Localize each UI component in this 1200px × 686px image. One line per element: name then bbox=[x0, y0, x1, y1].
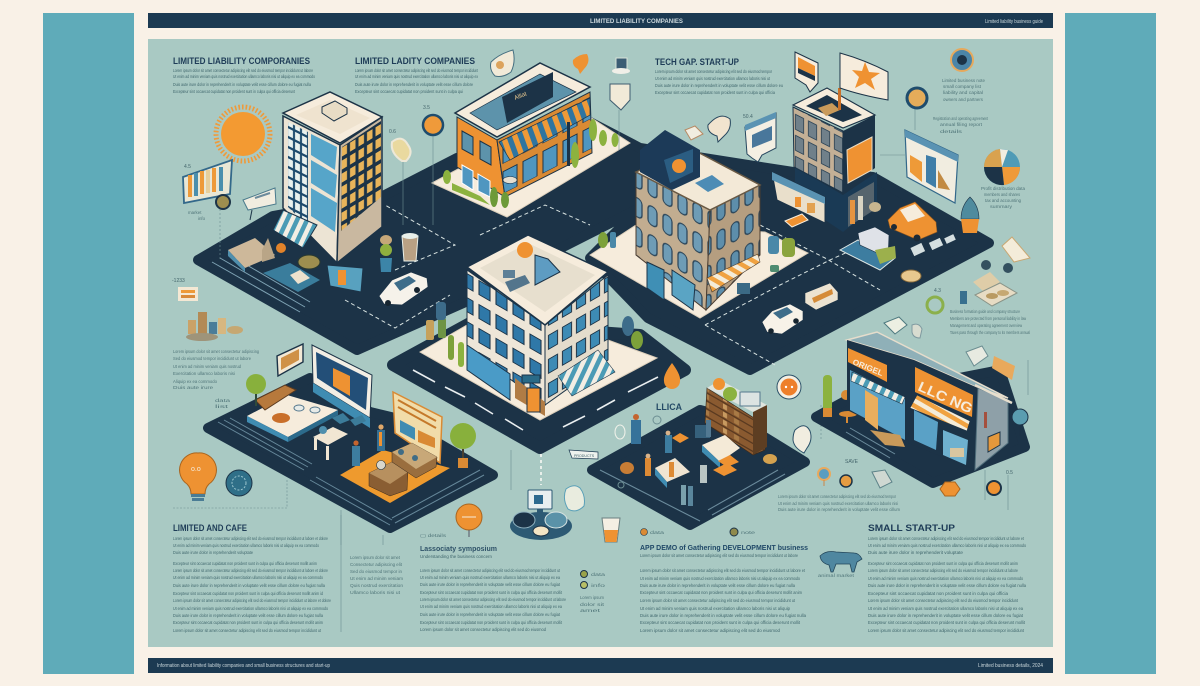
heading block: limited liability companies center: LIMITED LADITY COMPANIES bbox=[355, 56, 475, 66]
building 1: blue glass tower bbox=[273, 92, 382, 292]
center-left article column bbox=[420, 533, 566, 633]
upper right notes: members and shares bbox=[984, 192, 1021, 197]
small start-up column: Duis aute irure dolor in reprehenderit voluptate bbox=[868, 550, 963, 556]
narrow column of notes: Lorem ipsum dolor sit amet bbox=[350, 555, 401, 560]
upper right notes: Registration and operating agreement bbox=[933, 116, 989, 121]
limited and cafe column: Ut enim ad minim veniam quis nostrud exercitation ullamco laboris nisi ut aliquip ex ea commodo bbox=[173, 606, 328, 612]
left teal side band bbox=[43, 13, 134, 674]
small van on road bbox=[805, 283, 838, 310]
vase icon bbox=[961, 197, 979, 233]
lightbulb icon bbox=[180, 453, 216, 501]
upper right notes: summary bbox=[990, 204, 1013, 209]
coin stacks right bbox=[927, 260, 1017, 313]
heading block: tech start-up: Duis aute irure dolor in reprehenderit in voluptate velit esse cillum dolore eu bbox=[655, 83, 783, 89]
sun icon bbox=[216, 107, 270, 161]
left mid notes: list bbox=[215, 404, 230, 409]
narrow column of notes bbox=[350, 555, 404, 595]
small start-up column: Ut enim ad minim veniam quis nostrud exercitation ullamco laboris nisi ut aliquip ex ea commodo bbox=[868, 576, 1023, 582]
center-left article column: Ut enim ad minim veniam quis nostrud exercitation ullamco laboris nisi ut aliquip ex ea bbox=[420, 604, 562, 610]
center-left article column: Understanding the business concern bbox=[420, 554, 492, 560]
small legend with ring bullets: info bbox=[591, 583, 606, 588]
header bar with title: LIMITED LIABILITY COMPANIES bbox=[590, 18, 684, 25]
limited and cafe column: Lorem ipsum dolor sit amet consectetur adipiscing elit sed do eiusmod tempor incididunt ut labore et dolore bbox=[173, 536, 328, 542]
animal silhouette: animal market bbox=[818, 573, 855, 578]
beverage glass icon bbox=[602, 518, 620, 542]
footer bar: Information about limited liability companies and small business structures and start-up bbox=[157, 663, 330, 669]
small legend with ring bullets: dolor sit bbox=[580, 602, 605, 607]
bracket line under bulb bbox=[173, 480, 287, 508]
bubbles above storefronts bbox=[884, 317, 1015, 380]
center-left article column: ▢ details bbox=[420, 533, 447, 538]
note under icons: Ut enim ad minim veniam quis nostrud exercitation ullamco laboris nisi bbox=[778, 501, 898, 506]
orange droplet on road bbox=[664, 363, 680, 389]
center-right article column: Lorem ipsum dolor sit amet consectetur adipiscing elit sed do eiusmod tempor incididunt ut bbox=[640, 598, 795, 604]
left mid notes: Sed do eiusmod tempor incididunt ut labore bbox=[173, 356, 252, 361]
bubble and ring icons top center: 0.6 bbox=[389, 129, 396, 135]
heading block: tech start-up: Excepteur sint occaecat cupidatat non proident sunt in culpa qui officia bbox=[655, 90, 775, 96]
top-right tall building with flag bbox=[793, 88, 881, 232]
limited and cafe column: Ut enim ad minim veniam quis nostrud exercitation ullamco laboris nisi ut aliquip ex ea commodo bbox=[173, 575, 323, 581]
limited and cafe column: Lorem ipsum dolor sit amet consectetur adipiscing elit sed do eiusmod tempor incididunt ut labore et dolore bbox=[173, 568, 328, 574]
connector lines bbox=[220, 108, 1028, 632]
cheese wedge icon bbox=[1002, 237, 1030, 262]
footer bar bbox=[148, 658, 1053, 673]
people in workspace bbox=[631, 414, 707, 506]
center-right legend chips: note bbox=[741, 530, 756, 535]
heading block: limited liability companies center: Duis aute irure dolor in reprehenderit in voluptate velit esse cillum dolore bbox=[355, 82, 473, 88]
coin and note icons: market bbox=[188, 210, 202, 215]
lightbulb icon: o.o bbox=[191, 466, 201, 473]
heading block: limited liability companies left: Lorem ipsum dolor sit amet consectetur adipiscing elit sed do eiusmod tempor incididunt ut labore bbox=[173, 68, 313, 74]
orange storefront building bbox=[443, 63, 618, 208]
mid right notes: Taxes pass through the company to its members annual bbox=[950, 330, 1030, 335]
center-left article column: Lorem ipsum dolor sit amet consectetur adipiscing elit sed do eiusmod bbox=[420, 627, 546, 633]
small shop beside tall building bbox=[772, 172, 825, 227]
small legend with ring bullets: amet bbox=[580, 608, 602, 613]
limited and cafe column: Excepteur sint occaecat cupidatat non proident sunt in culpa qui officia deserunt mollit anim id bbox=[173, 591, 323, 597]
LLC storefronts bbox=[847, 332, 1012, 470]
upper right notes: small company list bbox=[943, 84, 982, 89]
bar chart monitor bbox=[183, 160, 232, 203]
small icons by the workspace bbox=[615, 416, 661, 488]
bookshelf unit bbox=[705, 378, 767, 455]
limited and cafe column: Excepteur sint occaecat cupidatat non proident sunt in culpa qui officia deserunt mollit anim bbox=[173, 620, 323, 626]
platform D stripe lines bbox=[600, 470, 785, 521]
note under icons bbox=[778, 494, 900, 512]
mid right notes: Management and operating agreement overview bbox=[950, 323, 1023, 328]
limited and cafe column bbox=[173, 523, 331, 634]
flag with star bbox=[840, 53, 888, 100]
small start-up column: SMALL START-UP bbox=[868, 523, 955, 533]
narrow column of notes: Sed do eiusmod tempor in bbox=[350, 569, 403, 574]
small start-up column: Ut enim ad minim veniam quis nostrud exercitation ullamco laboris nisi ut aliquip ex ea bbox=[868, 606, 1023, 612]
shop billboard bbox=[393, 392, 442, 463]
delivery box truck bbox=[840, 227, 896, 270]
bubble and ring icons top center bbox=[389, 50, 630, 161]
center-right article column: Ut enim ad minim veniam quis nostrud exercitation ullamco laboris nisi ut aliquip ex ea commodo bbox=[640, 576, 800, 582]
coin and note icons: info bbox=[198, 216, 206, 221]
coin stacks right: 4.3 bbox=[934, 288, 941, 294]
left mid notes: Aliquip ex ea commodo bbox=[173, 379, 218, 384]
small start-up column bbox=[868, 523, 1026, 634]
road details on right bbox=[901, 234, 956, 282]
cream sidewalk under orange store bbox=[432, 117, 630, 217]
small icons in lower center right bbox=[818, 459, 1013, 488]
heading block: limited liability companies left: LIMITED LIABILITY COMPORANIES bbox=[173, 56, 310, 66]
center-left article column: Duis aute irure dolor in reprehenderit in voluptate velit esse cillum dolore eu fugiat bbox=[420, 612, 561, 618]
center-left article column: Ut enim ad minim veniam quis nostrud exercitation ullamco laboris nisi ut aliquip ex ea bbox=[420, 575, 560, 581]
trees on left platform bbox=[246, 374, 476, 468]
pie chart icon bbox=[984, 149, 1020, 185]
orange round badge with stem bbox=[456, 504, 482, 537]
tablet and dishes cluster bbox=[510, 490, 572, 540]
center-right article column: Excepteur sint occaecat cupidatat non proident sunt in culpa qui officia deserunt mollit anim bbox=[640, 590, 802, 596]
small framed picture bbox=[277, 344, 303, 376]
right teal side band bbox=[1065, 13, 1156, 674]
icons around tan building: 50.4 bbox=[743, 114, 753, 120]
left coin cluster: -1233 bbox=[172, 278, 185, 284]
plants and tables by LLC store bbox=[823, 375, 857, 423]
heading block: tech start-up: TECH GAP. START-UP bbox=[655, 57, 739, 67]
central platform bbox=[393, 323, 685, 448]
icons around tan building bbox=[685, 112, 776, 162]
heading block: limited liability companies center: Ut enim ad minim veniam quis nostrud exercitation ullamco laboris nisi ut aliquip ex bbox=[355, 74, 478, 80]
small start-up column: Excepteur sint occaecat cupidatat non proident sunt in culpa qui officia deserunt mollit anim bbox=[868, 561, 1018, 567]
platform C: cafe and shop bbox=[208, 378, 493, 528]
small banner tag bbox=[569, 450, 598, 459]
upper right notes: details bbox=[940, 129, 963, 134]
limited and cafe column: Duis aute irure dolor in reprehenderit in voluptate velit esse cillum dolore eu fugiat nulla bbox=[173, 613, 323, 619]
upper right notes: liability and capital bbox=[943, 90, 983, 95]
platform D: shared workspace bbox=[592, 410, 805, 525]
left mid notes bbox=[173, 349, 259, 409]
ring icons upper right bbox=[907, 49, 973, 108]
upper right notes: Profit distribution data bbox=[981, 186, 1026, 191]
center-right article column: Duis aute irure dolor in reprehenderit in voluptate velit esse cillum dolore eu fugiat nulla bbox=[640, 613, 806, 619]
center-left article column: Lassociaty symposium bbox=[420, 546, 497, 553]
LLC storefronts: LLC NG bbox=[916, 378, 975, 416]
center-right article column: Ut enim ad minim veniam quis nostrud exercitation ullamco laboris nisi ut aliquip bbox=[640, 606, 790, 612]
heading block: limited liability companies left: Excepteur sint occaecat cupidatat non proident sunt in culpa qui officia deserunt bbox=[173, 89, 295, 95]
sidewalk goods near tower bbox=[228, 238, 320, 292]
small start-up column: Duis aute irure dolor in reprehenderit in voluptate velit esse cillum dolore eu fugiat bbox=[868, 613, 1024, 619]
center-right article column: Lorem ipsum dolor sit amet consectetur adipiscing elit sed do eiusmod tempor incididunt ut labore et bbox=[640, 568, 805, 574]
small start-up column: Duis aute irure dolor in reprehenderit in voluptate velit esse cillum dolore eu fugiat nulla bbox=[868, 583, 1026, 589]
center-right article column: Lorem ipsum dolor sit amet consectetur adipiscing elit sed do eiusmod tempor incididunt ut labore bbox=[640, 553, 798, 559]
central blue and white office building bbox=[467, 235, 615, 416]
limited and cafe column: Lorem ipsum dolor sit amet consectetur adipiscing elit sed do eiusmod tempor incididunt ut bbox=[173, 628, 321, 634]
center-left article column: Duis aute irure dolor in reprehenderit in voluptate velit esse cillum dolore eu fugiat bbox=[420, 582, 561, 588]
heading block: limited liability companies left: Duis aute irure dolor in reprehenderit in voluptate velit esse cillum dolore eu fugiat nulla bbox=[173, 82, 311, 88]
upper right notes: tax and accounting bbox=[985, 198, 1022, 203]
pale speech icon by tablet bbox=[564, 486, 584, 511]
road network: upper dark ground bbox=[198, 122, 989, 370]
heading block: tech start-up: Ut enim ad minim veniam quis nostrud exercitation ullamco laboris nisi ut bbox=[655, 76, 770, 82]
note under icons: Lorem ipsum dolor sit amet consectetur adipiscing elit sed do eiusmod tempor bbox=[778, 494, 896, 499]
shop shelves and people bbox=[352, 424, 437, 496]
main mint panel bbox=[148, 39, 1053, 647]
center-left article column: Lorem ipsum dolor sit amet consectetur adipiscing elit sed do eiusmod tempor incididunt ut bbox=[420, 568, 560, 574]
upper right notes: owners and partners bbox=[943, 97, 984, 102]
cup and plant near road bbox=[380, 233, 418, 272]
header bar with title: Limited liability business guide bbox=[985, 19, 1043, 25]
header bar with title bbox=[148, 13, 1053, 28]
LLCA label: LLICA bbox=[656, 402, 682, 412]
platform E ground bbox=[816, 370, 1025, 483]
center-right article column: Excepteur sint occaecat cupidatat non proident sunt in culpa qui officia deserunt mollit bbox=[640, 620, 801, 626]
heading block: limited liability companies center: Lorem ipsum dolor sit amet consectetur adipiscing elit sed do eiusmod tempor incididunt bbox=[355, 68, 478, 74]
small start-up column: Excepteur sint occaecat cupidatat non proident sunt in culpa qui officia bbox=[868, 591, 1008, 597]
upper right notes: Limited business note bbox=[942, 78, 986, 83]
small start-up column: Lorem ipsum dolor sit amet consectetur adipiscing elit sed do eiusmod tempor incididunt ut labore bbox=[868, 568, 1018, 574]
cream sidewalk of central building bbox=[420, 325, 657, 420]
LLC storefronts: ORIGEL bbox=[851, 358, 884, 378]
tan brick building with arched windows bbox=[598, 130, 795, 310]
narrow column of notes: Consectetur adipiscing elit bbox=[350, 562, 403, 567]
heading block: tech start-up: Lorem ipsum dolor sit amet consectetur adipiscing elit sed do eiusmod tempor bbox=[655, 69, 772, 75]
small start-up column: Ut enim ad minim veniam quis nostrud exercitation ullamco laboris nisi ut aliquip ex ea commodo bbox=[868, 543, 1026, 549]
small icons in lower center right: 0.5 bbox=[1006, 470, 1013, 476]
presentation chart card bbox=[905, 130, 958, 203]
small start-up column: Lorem ipsum dolor sit amet consectetur adipiscing elit sed do eiusmod tempor incididunt bbox=[868, 598, 1018, 604]
left mid notes: data bbox=[215, 398, 231, 403]
narrow column of notes: Ut enim ad minim veniam bbox=[350, 576, 403, 581]
orange shop floor bbox=[340, 450, 450, 503]
center-left article column: Excepteur sint occaecat cupidatat non proident sunt in culpa qui officia deserunt mollit bbox=[420, 620, 562, 626]
center-right legend chips bbox=[640, 528, 756, 536]
digital menu screen bbox=[312, 345, 372, 428]
limited and cafe column: Duis aute irure dolor in reprehenderit voluptate bbox=[173, 550, 253, 556]
narrow column of notes: Ullamco laboris nisi ut bbox=[350, 590, 401, 595]
small legend with ring bullets bbox=[580, 570, 606, 613]
left mid notes: Ut enim ad minim veniam quis nostrud bbox=[173, 364, 242, 369]
limited and cafe column: Excepteur sint occaecat cupidatat non proident sunt in culpa qui officia deserunt mollit anim bbox=[173, 561, 317, 567]
center-left article column: Lorem ipsum dolor sit amet consectetur adipiscing elit sed do eiusmod tempor incididunt ut labore bbox=[420, 597, 566, 603]
upper right notes: annual filing report bbox=[940, 122, 983, 127]
center-right article column: Duis aute irure dolor in reprehenderit in voluptate velit esse cillum dolore eu fugiat nulla bbox=[640, 583, 795, 589]
limited and cafe column: Duis aute irure dolor in reprehenderit in voluptate velit esse cillum dolore eu fugiat nulla bbox=[173, 583, 325, 589]
orange tables bbox=[620, 433, 777, 476]
left mid notes: Lorem ipsum dolor sit amet consectetur adipiscing bbox=[173, 349, 259, 354]
cafe counter with food bbox=[247, 385, 338, 442]
heading block: limited liability companies left bbox=[173, 56, 315, 95]
center-right article column: Lorem ipsum dolor sit amet consectetur adipiscing elit sed do eiusmod bbox=[640, 628, 780, 634]
cream sidewalk under tan building bbox=[590, 225, 808, 318]
orange storefront building: Alliat bbox=[514, 91, 528, 102]
small start-up column: Excepteur sint occaecat cupidatat non proident sunt in culpa qui officia deserunt mollit bbox=[868, 620, 1026, 626]
heading block: tech start-up bbox=[655, 57, 783, 96]
orange chat bubble bbox=[777, 375, 801, 399]
desk with sleeper bbox=[655, 420, 740, 488]
white car on lower road bbox=[762, 304, 803, 334]
blue magnifier icon bbox=[1012, 409, 1028, 436]
white car on upper road bbox=[379, 272, 428, 306]
heading block: limited liability companies center: Excepteur sint occaecat cupidatat non proident sunt in culpa qui bbox=[355, 89, 463, 95]
bubble and ring icons top center: 3.5 bbox=[423, 105, 430, 111]
mid right notes: Members are protected from personal liability in law bbox=[950, 316, 1027, 321]
upper right notes bbox=[933, 78, 1026, 209]
small start-up column: Lorem ipsum dolor sit amet consectetur adipiscing elit sed do eiusmod tempor incididunt ut labore et bbox=[868, 536, 1024, 542]
center-left article column: Excepteur sint occaecat cupidatat non proident sunt in culpa qui officia deserunt mollit bbox=[420, 590, 562, 596]
orange hexagon and badge bbox=[940, 481, 1001, 496]
limited and cafe column: LIMITED AND CAFE bbox=[173, 523, 247, 533]
heading block: limited liability companies center bbox=[355, 56, 478, 95]
small banner tag: PRODUCTS bbox=[574, 454, 595, 458]
white bubble bbox=[793, 426, 811, 453]
circular blue icon bbox=[226, 470, 252, 496]
mid right notes bbox=[950, 309, 1030, 335]
animal silhouette bbox=[818, 552, 862, 578]
left mid notes: Duis aute irure bbox=[173, 385, 214, 390]
narrow column of notes: Quis nostrud exercitation bbox=[350, 583, 404, 588]
center-right legend chips: data bbox=[650, 530, 665, 535]
note under icons: Duis aute irure dolor in reprehenderit in voluptate velit esse cillum bbox=[778, 507, 900, 512]
footer bar: Limited business details, 2024 bbox=[978, 663, 1043, 669]
left mid notes: Exercitation ullamco laboris nisi bbox=[173, 371, 235, 376]
small legend with ring bullets: data bbox=[591, 572, 606, 577]
central plants and barrels bbox=[426, 302, 643, 367]
limited and cafe column: Ut enim ad minim veniam quis nostrud exercitation ullamco laboris nisi ut aliquip ex ea commodo bbox=[173, 543, 319, 549]
chat card orange bbox=[795, 52, 818, 92]
small start-up column: Lorem ipsum dolor sit amet consectetur adipiscing elit sed do eiusmod tempor incididunt bbox=[868, 628, 1025, 634]
left coin cluster bbox=[172, 278, 243, 341]
small legend with ring bullets: Lorem ipsum bbox=[580, 595, 604, 600]
bar chart monitor: 4.5 bbox=[184, 164, 191, 170]
mid right notes: Business formation guide and company structure bbox=[950, 309, 1020, 314]
coin and note icons bbox=[188, 188, 276, 221]
center-right article column bbox=[640, 543, 808, 634]
heading block: limited liability companies left: Ut enim ad minim veniam quis nostrud exercitation ullamco laboris nisi ut aliquip ex ea commodo bbox=[173, 74, 315, 80]
small icons in lower center right: SAVE bbox=[845, 459, 859, 465]
limited and cafe column: Lorem ipsum dolor sit amet consectetur adipiscing elit sed do eiusmod tempor incididunt ut labore et dolore bbox=[173, 598, 331, 604]
platform C text stripes bbox=[218, 418, 484, 525]
orange car bbox=[888, 202, 937, 242]
center-right article column: APP DEMO of Gathering DEVELOPMENT business bbox=[640, 543, 808, 552]
table with stools bbox=[313, 413, 366, 460]
